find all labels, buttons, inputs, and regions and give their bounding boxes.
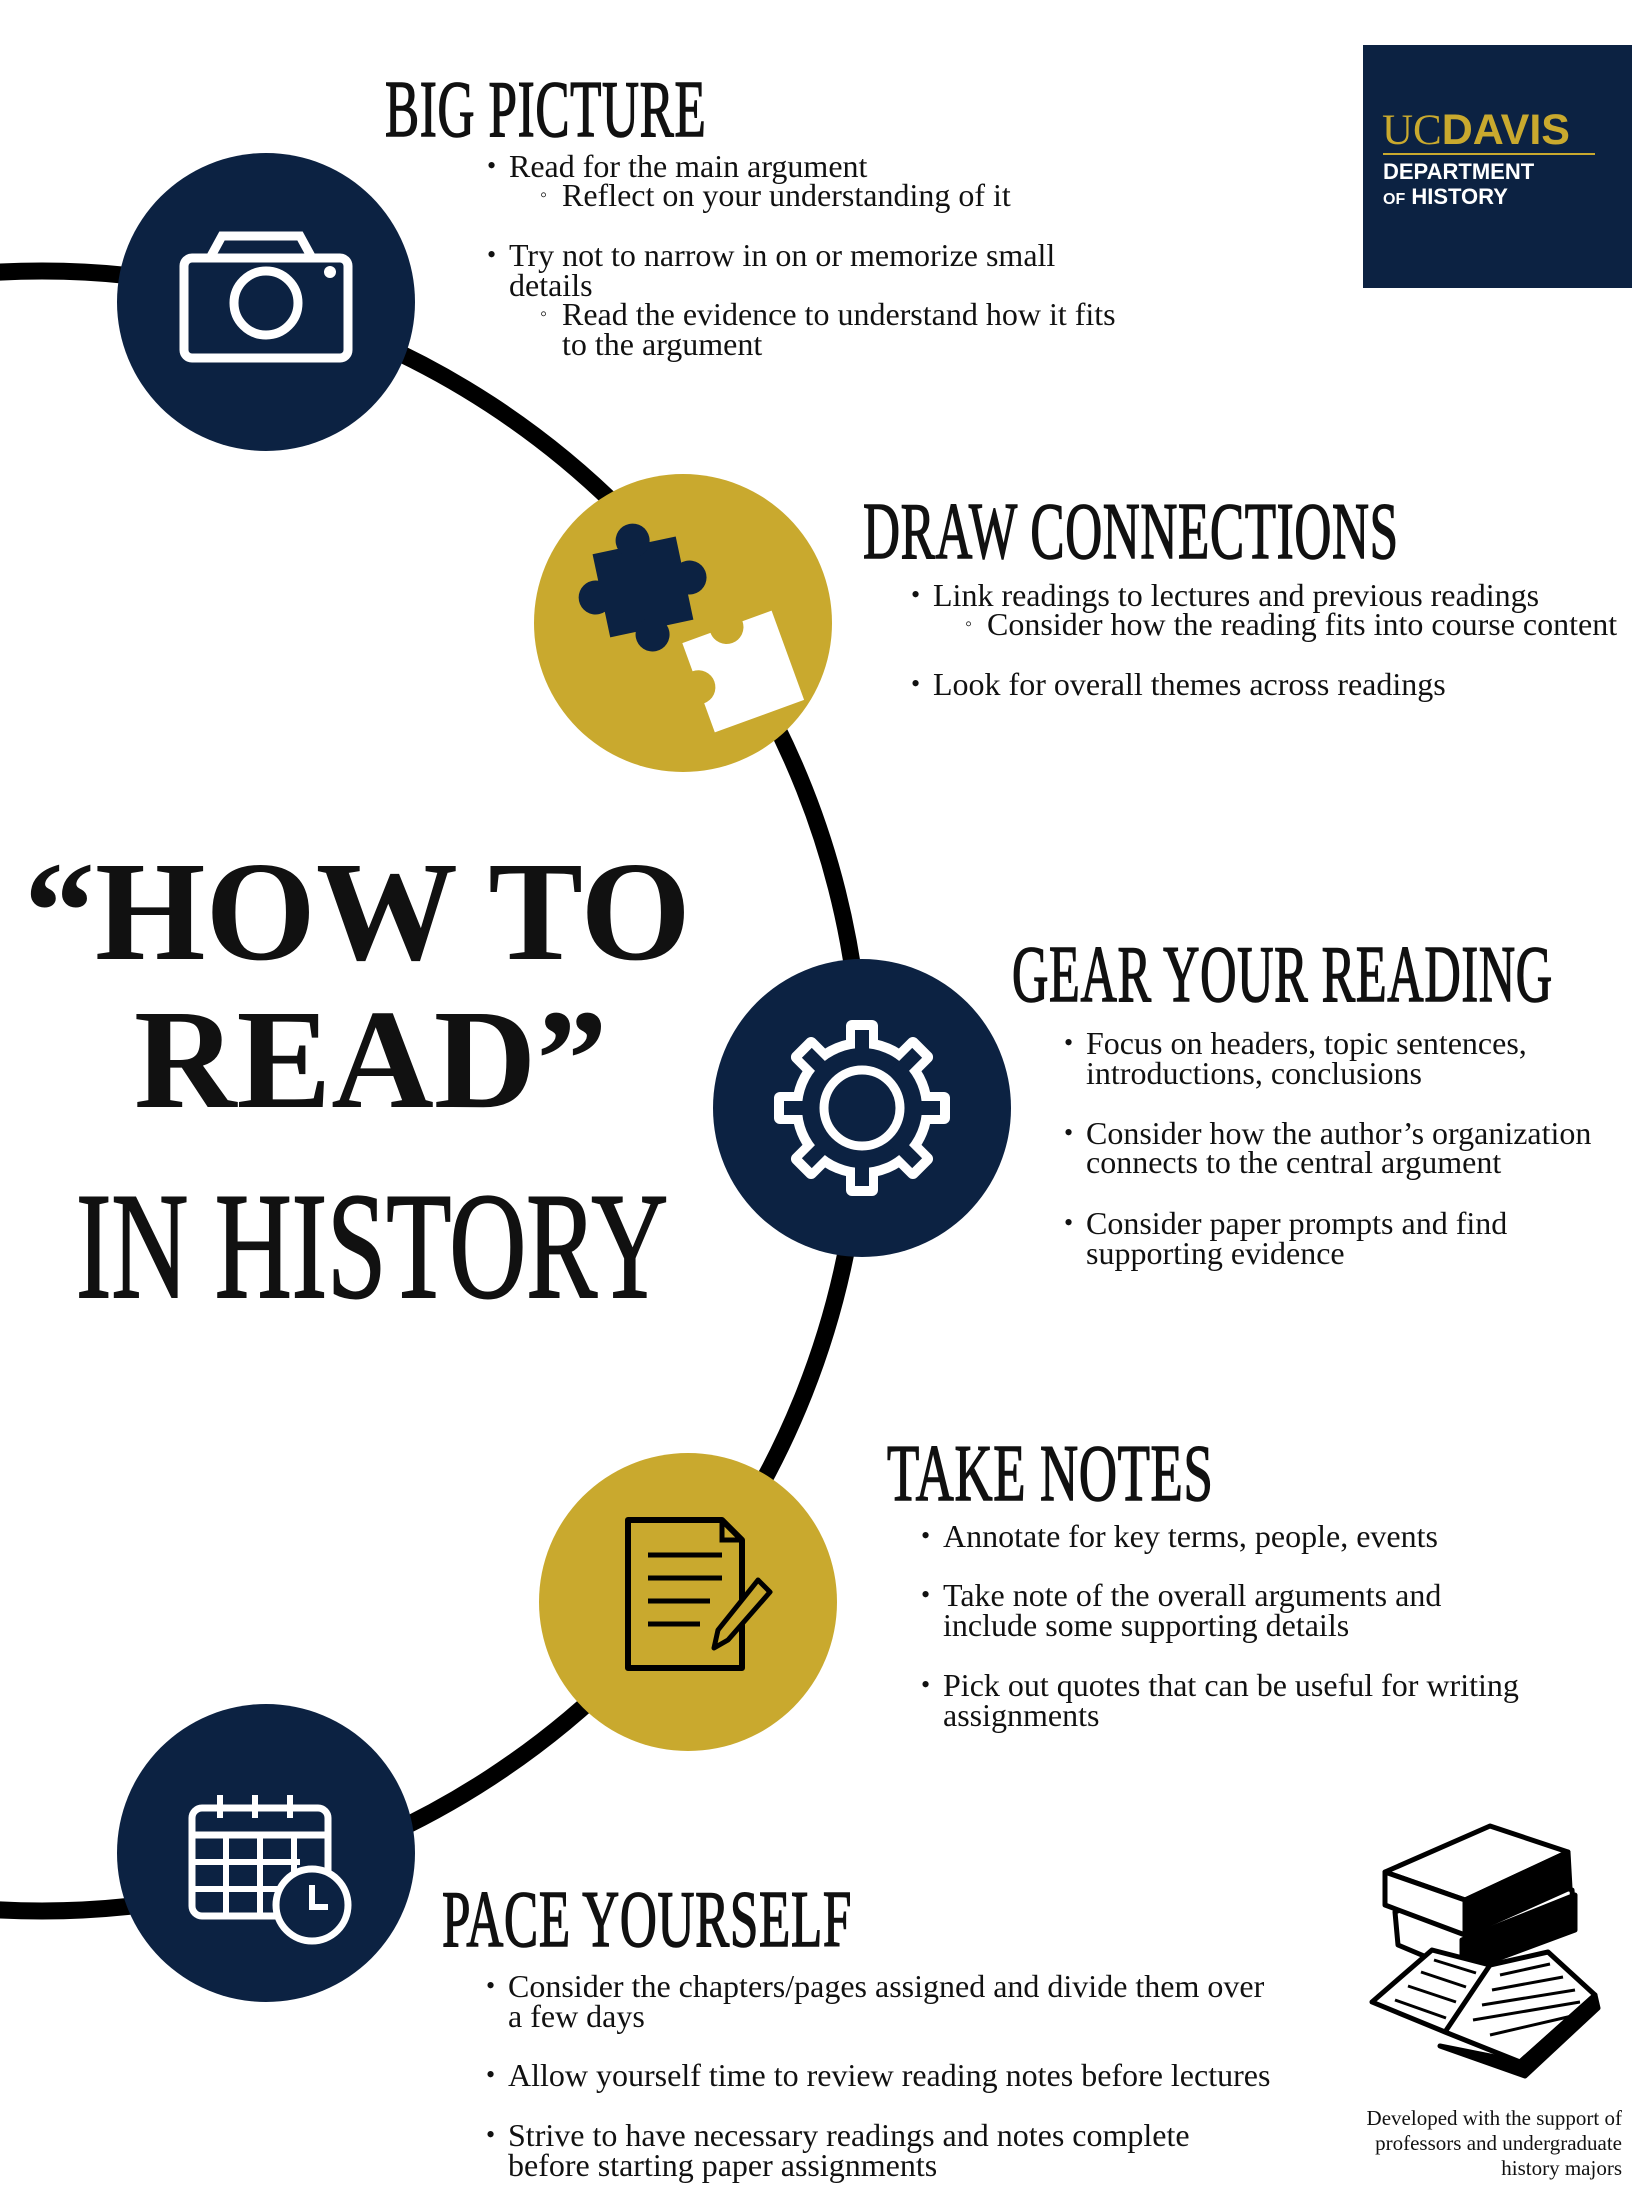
section: take notes: assignments	[943, 1697, 1099, 1733]
section: big picture: ◦	[540, 184, 547, 206]
arc connector	[0, 271, 862, 1911]
section: gear your reading	[1012, 931, 1591, 1271]
logo: UC Davis Department of History: UCDAVIS	[1382, 106, 1570, 154]
section: gear your reading: connects to the central argument	[1086, 1144, 1501, 1180]
section: pace yourself	[442, 1876, 1270, 2183]
section: draw connections: Consider how the reading fits into course content	[987, 606, 1617, 642]
footer credit: professors and undergraduate	[1375, 2131, 1622, 2155]
section: big picture: •	[487, 151, 496, 180]
section: big picture: to the argument	[562, 326, 762, 362]
section: draw connections: Link readings to lectures and previous readings	[933, 577, 1539, 613]
icon: document circle	[539, 1453, 837, 1751]
icon: calendar circle	[117, 1704, 415, 2002]
main title: “HOW TO	[24, 832, 691, 990]
section: big picture: Reflect on your understanding of it	[562, 177, 1011, 213]
section: pace yourself: •	[486, 2060, 495, 2089]
section: big picture: details	[509, 267, 593, 303]
section: draw connections: ◦	[965, 613, 972, 635]
section: gear your reading: introductions, conclusions	[1086, 1055, 1422, 1091]
section: big picture	[385, 66, 1116, 362]
icon: books	[1372, 1826, 1598, 2076]
section: take notes	[887, 1430, 1519, 1733]
section: big picture: Read for the main argument	[509, 148, 867, 184]
section: take notes: •	[921, 1670, 930, 1699]
section: pace yourself: Consider the chapters/pages assigned and divide them over	[508, 1968, 1264, 2004]
heading: draw connections: DRAW CONNECTIONS	[863, 488, 1399, 576]
section: gear your reading: •	[1064, 1208, 1073, 1237]
section: big picture: •	[487, 240, 496, 269]
section: big picture: ◦	[540, 303, 547, 325]
section: gear your reading: Consider paper prompts and find	[1086, 1205, 1507, 1241]
logo: UC Davis Department of History	[1363, 45, 1632, 288]
section: take notes: Take note of the overall arguments and	[943, 1577, 1441, 1613]
heading: big picture: BIG PICTURE	[385, 66, 706, 154]
section: draw connections	[863, 488, 1617, 702]
footer credit: history majors	[1501, 2156, 1622, 2180]
section: pace yourself: •	[486, 2120, 495, 2149]
section: gear your reading: Focus on headers, topic sentences,	[1086, 1025, 1527, 1061]
icon: gear circle	[713, 959, 1011, 1257]
section: draw connections: •	[911, 580, 920, 609]
section: gear your reading: •	[1064, 1118, 1073, 1147]
section: take notes: •	[921, 1580, 930, 1609]
heading: take notes: TAKE NOTES	[887, 1430, 1213, 1518]
logo: UC Davis Department of History: OF HISTORY	[1383, 184, 1508, 209]
heading: pace yourself: PACE YOURSELF	[442, 1876, 852, 1964]
section: take notes: Annotate for key terms, people, events	[943, 1518, 1438, 1554]
section: pace yourself: •	[486, 1971, 495, 2000]
icon: puzzle circle	[534, 474, 832, 772]
footer credit: Developed with the support of	[1367, 2106, 1622, 2130]
section: big picture: Read the evidence to understand how it fits	[562, 296, 1116, 332]
section: gear your reading: Consider how the author’s organization	[1086, 1115, 1591, 1151]
main title: IN HISTORY	[76, 1162, 668, 1330]
section: take notes: include some supporting details	[943, 1607, 1349, 1643]
logo: UC Davis Department of History: DEPARTMENT	[1383, 159, 1534, 184]
footer credit	[1367, 2106, 1622, 2180]
section: big picture: Try not to narrow in on or memorize small	[509, 237, 1055, 273]
section: draw connections: Look for overall themes across readings	[933, 666, 1446, 702]
icon: camera circle	[117, 153, 415, 451]
section: take notes: •	[921, 1521, 930, 1550]
section: gear your reading: •	[1064, 1028, 1073, 1057]
main title: READ”	[134, 980, 607, 1138]
section: gear your reading: supporting evidence	[1086, 1235, 1345, 1271]
heading: gear your reading: GEAR YOUR READING	[1012, 931, 1553, 1019]
section: pace yourself: Strive to have necessary readings and notes complete	[508, 2117, 1190, 2153]
section: take notes: Pick out quotes that can be useful for writing	[943, 1667, 1519, 1703]
section: draw connections: •	[911, 669, 920, 698]
section: pace yourself: before starting paper assignments	[508, 2147, 937, 2183]
section: pace yourself: Allow yourself time to review reading notes before lectures	[508, 2057, 1270, 2093]
section: pace yourself: a few days	[508, 1998, 645, 2034]
main title	[24, 832, 691, 1330]
